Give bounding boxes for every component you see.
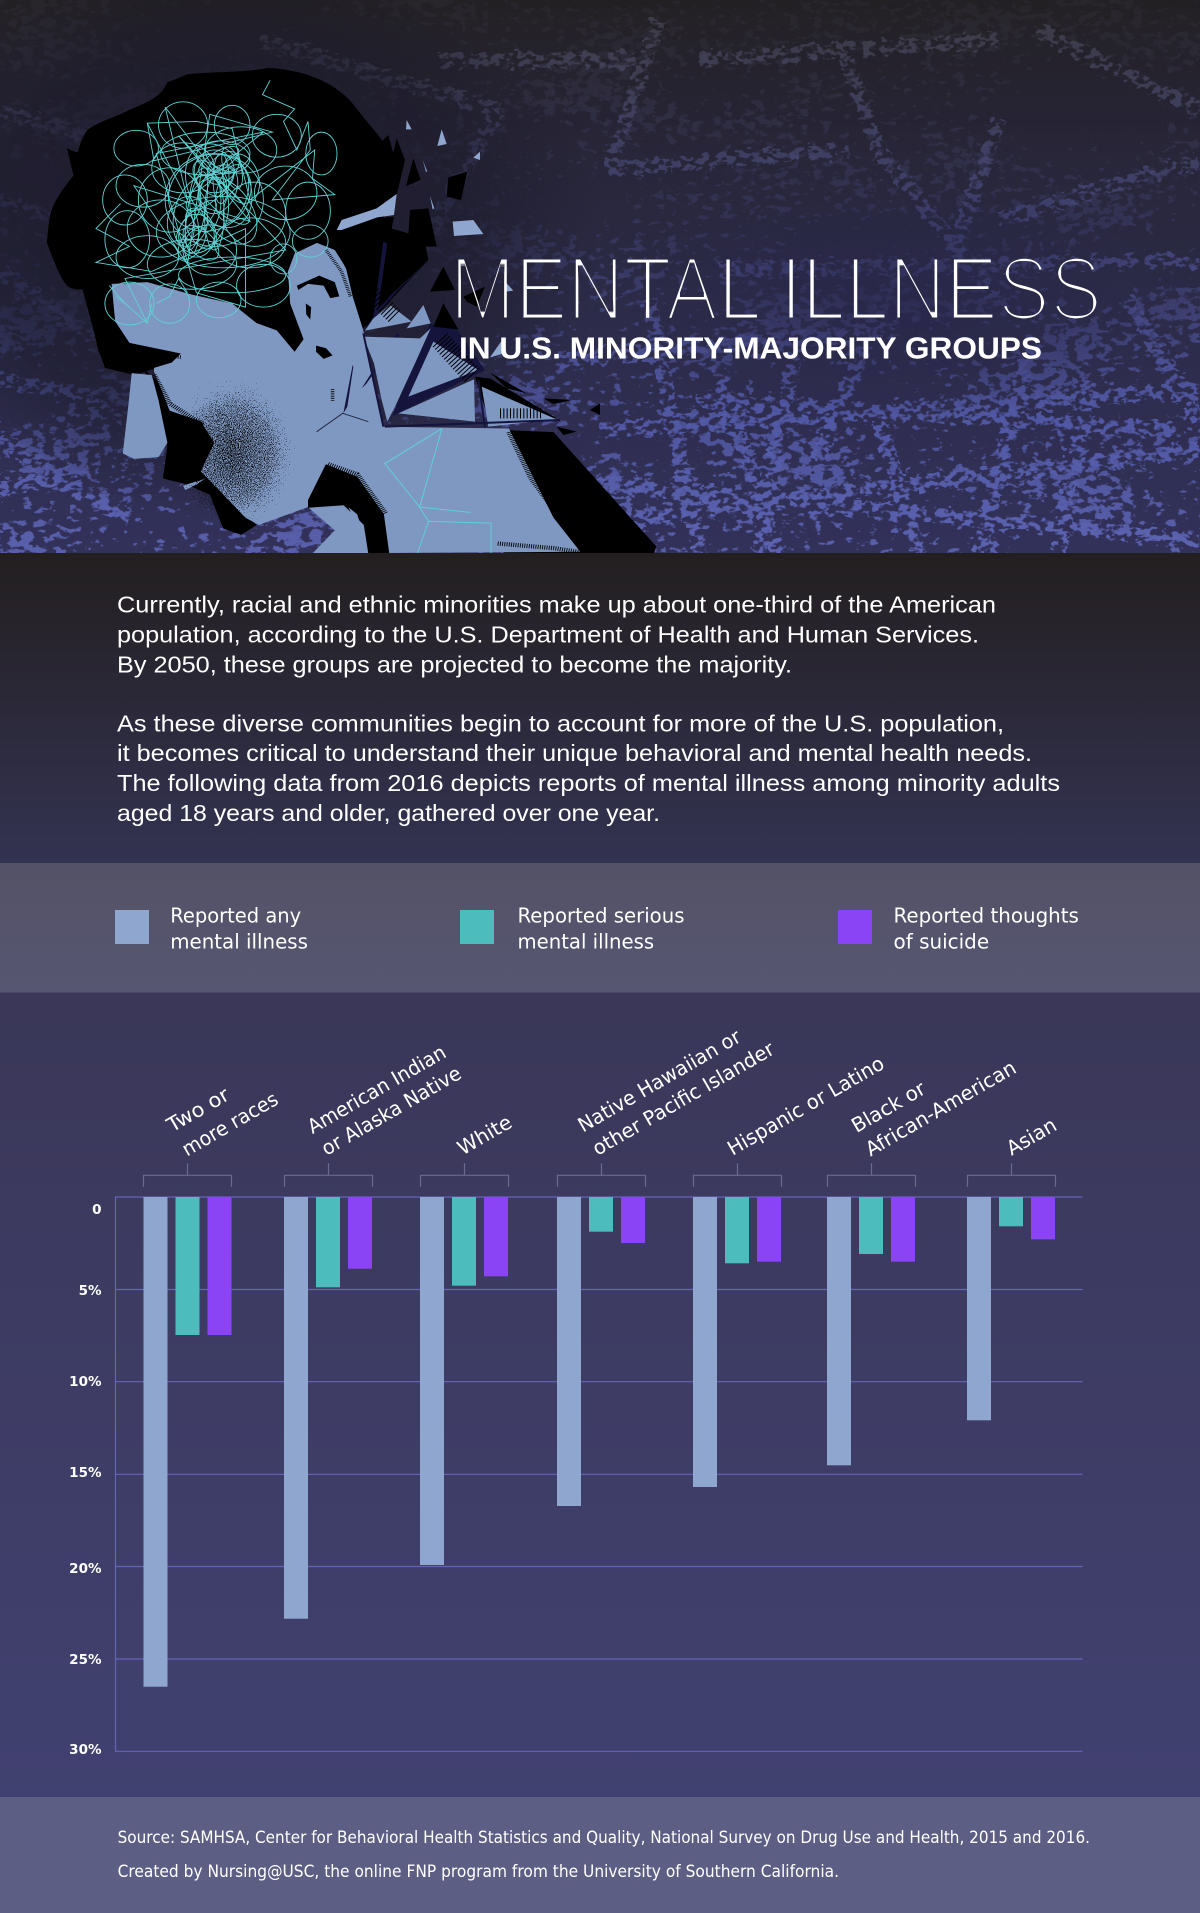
face shadow under nose and chin [143,368,257,535]
y axis labels: 30% [69,1742,102,1758]
subtitle text: IN U.S. MINORITY-MAJORITY GROUPS [459,330,1042,366]
y axis labels: 25% [69,1652,102,1668]
label: Black or African-American: African-American [861,1055,1020,1161]
y axis labels: 5% [79,1283,102,1299]
bars: Native Hawaiian or other Pacific Islander [557,1197,645,1506]
label: Black or African-American: Black or [847,1076,930,1138]
legend item: thoughts of suicide [838,904,1079,954]
illustration: head in profile [47,68,656,554]
bars: two or more races [144,1197,232,1687]
dark base of the shattered head [337,120,437,323]
black shard fragments [406,158,600,435]
dark spikes around neck [343,242,485,422]
text block: second paragraph [117,710,1060,826]
hero banner [0,0,1200,554]
jaw highlight [348,507,364,534]
text block: first paragraph: population, according to the U.S. Department of Health and Human Services. [117,622,979,648]
ear details [297,276,339,359]
shattered fragments [317,120,600,435]
y axis labels: 10% [69,1374,102,1390]
lip highlight [183,479,205,490]
panel: footer [0,1797,1200,1913]
y axis labels: 15% [69,1465,102,1481]
light shards [337,120,513,357]
label: Native Hawaiian or other Pacific Islander: other Pacific Islander [588,1036,779,1160]
jaw shadow crescent [308,464,389,554]
panel: introduction [0,553,1200,863]
source note: Source: SAMHSA, Center for Behavioral Health Statistics and Quality, National Survey on Drug Use and Health, 2015 and 2016. [118,1828,1090,1847]
y axis grid [116,1197,1082,1751]
legend item: any mental illness: Reported any [170,904,301,928]
beard stipple [158,368,306,539]
credit note: Created by Nursing@USC, the online FNP program from the University of Southern California. [118,1862,839,1881]
hair and head silhouette [47,68,384,375]
face crease lines [317,413,368,432]
bars: American Indian or Alaska Native [284,1197,372,1619]
text block: second paragraph: The following data from 2016 depicts reports of mental illness among minority adults [117,770,1060,796]
text block: second paragraph: it becomes critical to understand their unique behavioral and mental health needs. [117,740,1032,766]
text block: first paragraph: By 2050, these groups are projected to become the majority. [117,652,792,678]
label: two or more races: more races [178,1087,282,1161]
text block: first paragraph [117,592,996,678]
dark shard seams [363,333,560,427]
label: White: White [453,1110,516,1160]
label: Asian: Asian [1002,1113,1061,1160]
y axis labels [69,1202,102,1758]
label: Hispanic or Latino: Hispanic or Latino [723,1051,888,1160]
text block: first paragraph: Currently, racial and ethnic minorities make up about one-third of the American [117,592,996,618]
label: American Indian or Alaska Native: American Indian [303,1040,450,1139]
tangled scribble in brain [96,80,337,325]
text block: second paragraph: aged 18 years and older, gathered over one year. [117,800,660,826]
neck shadow wedge [491,430,656,554]
hatching strokes [121,250,589,554]
legend item: any mental illness [115,904,308,954]
shard hatching [358,280,543,413]
bars: White [420,1197,508,1565]
text block: second paragraph: As these diverse communities begin to account for more of the U.S. population, [117,710,1004,736]
legend item: serious mental illness: mental illness [518,930,654,954]
group labels [162,1024,1061,1161]
legend item: serious mental illness: Reported serious [518,904,684,928]
skin of face and neck [112,243,580,554]
title [450,239,1102,366]
main title text: MENTAL ILLNESS [450,239,1102,339]
bars: Asian [967,1197,1055,1420]
group brackets [144,1163,1056,1187]
neck crack lines [385,429,491,554]
legend item: any mental illness: mental illness [170,930,308,954]
panel: bar chart [0,992,1200,1797]
nose [123,373,167,459]
skin-coloured fragments [363,305,557,427]
y axis labels: 20% [69,1561,102,1577]
label: American Indian or Alaska Native: or Alaska Native [317,1061,465,1160]
y axis labels: 0 [92,1202,102,1218]
bars: Hispanic or Latino [693,1197,781,1487]
bars: Black or African-American [827,1197,915,1465]
label: Native Hawaiian or other Pacific Islander: Native Hawaiian or [574,1024,745,1137]
label: two or more races: Two or [162,1082,234,1138]
legend item: thoughts of suicide: of suicide [894,930,989,954]
panel: legend [0,863,1200,992]
legend item: thoughts of suicide: Reported thoughts [894,904,1079,928]
legend item: serious mental illness [460,904,684,954]
black wedge behind neck fragments [475,377,557,423]
